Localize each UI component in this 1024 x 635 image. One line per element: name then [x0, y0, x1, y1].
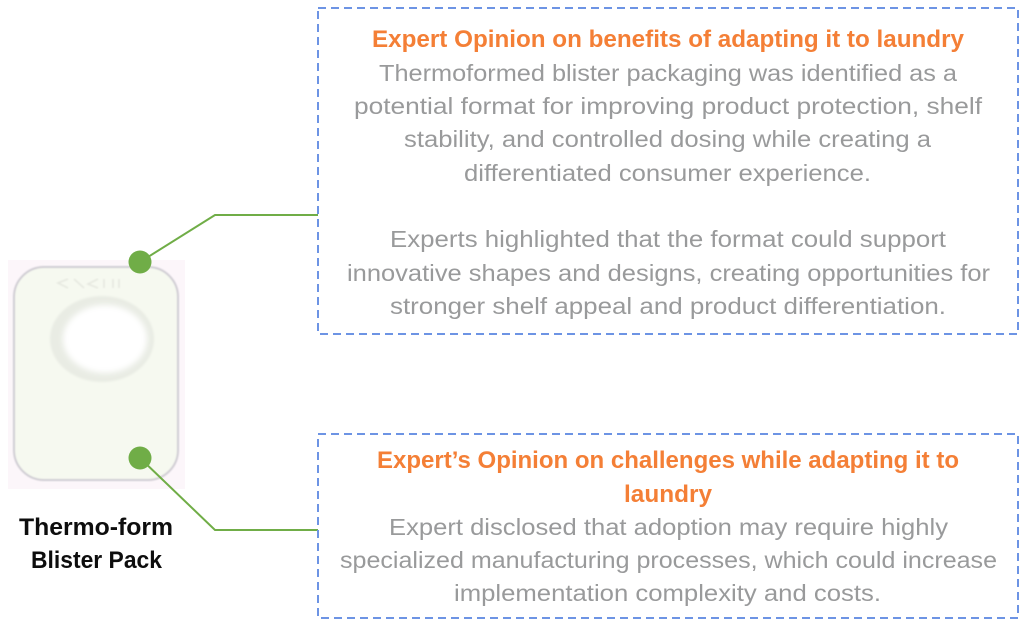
marker: bottom green dot	[128, 446, 152, 470]
connector: bottom callout line	[140, 458, 318, 530]
text block: benefits paragraph one: differentiated consumer experience.	[464, 160, 871, 186]
text block: benefits paragraph one: stability, and controlled dosing while creating a	[404, 126, 932, 152]
panel: benefits	[318, 8, 1018, 334]
text block: benefits paragraph two: innovative shapes and designs, creating opportunities for	[347, 260, 990, 286]
text block: benefits paragraph one	[354, 60, 983, 186]
connector: top callout line	[140, 215, 318, 262]
marker: top green dot	[128, 250, 152, 274]
heading: challenges	[377, 447, 959, 508]
heading: benefits: Expert Opinion on benefits of adapting it to laundry	[372, 26, 965, 53]
panel: challenges	[318, 434, 1018, 618]
text block: benefits paragraph one: potential format for improving product protection, shelf	[354, 93, 983, 119]
text block: challenges paragraph: implementation complexity and costs.	[454, 580, 881, 606]
heading: challenges: Expert’s Opinion on challenges while adapting it to	[377, 447, 959, 474]
text block: challenges paragraph	[340, 514, 997, 606]
text block: challenges paragraph: Expert disclosed that adoption may require highly	[389, 514, 948, 540]
text block: benefits paragraph two: Experts highlighted that the format could support	[390, 226, 947, 252]
label: product name	[19, 514, 173, 574]
text block: benefits paragraph one: Thermoformed blister packaging was identified as a	[379, 60, 958, 86]
label: product name: Blister Pack	[31, 547, 163, 574]
heading: challenges: laundry	[624, 481, 713, 508]
text block: benefits paragraph two	[347, 226, 990, 319]
label: product name: Thermo-form	[19, 514, 173, 541]
icon: thermo-form blister pack photo	[8, 260, 185, 489]
text block: challenges paragraph: specialized manufacturing processes, which could increase	[340, 547, 997, 573]
text block: benefits paragraph two: stronger shelf appeal and product differentiation.	[390, 293, 946, 319]
